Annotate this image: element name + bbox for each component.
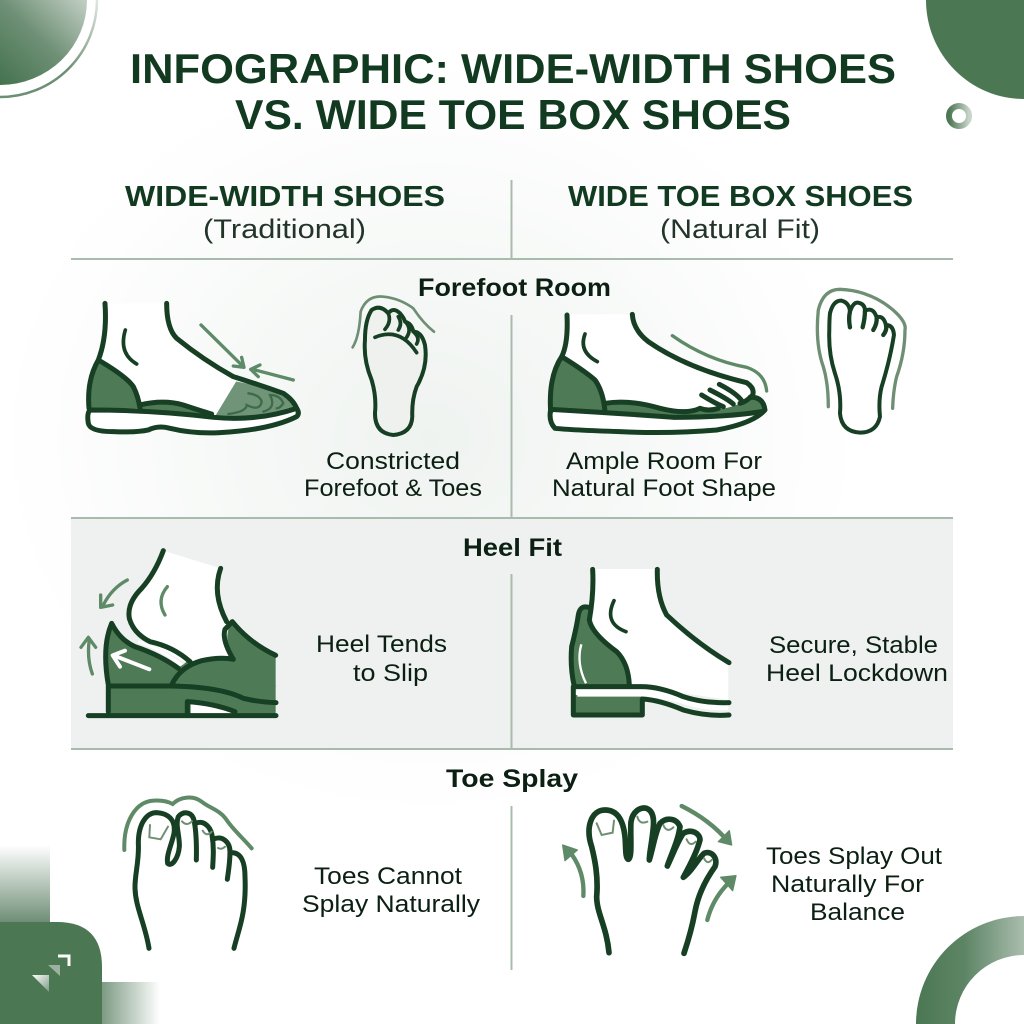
label: secure stable heel lockdown: Secure, Stable [769,632,938,659]
panel: heel fit band [71,518,953,749]
icon: natural fit shoe with ample toe room [550,314,767,433]
label: heel tends to slip: to Slip [353,660,428,687]
label: toes splay out naturally for balance: Naturally For [771,871,924,898]
decoration: top-right corner circle and small ring [926,0,1024,126]
column heading: wide-width shoes [125,181,445,244]
label: ample room for natural foot shape: Ample Room For [566,448,762,475]
label: secure stable heel lockdown: Heel Lockdown [766,660,948,687]
label: toes splay out naturally for balance: Balance [810,899,905,926]
icon: heel slipping out of traditional shoe [81,551,276,716]
label: toes cannot splay naturally: Toes Cannot [314,863,462,890]
column heading: wide toe box shoes: (Natural Fit) [660,214,820,244]
title [130,45,896,138]
label: toes cannot splay naturally: Splay Naturally [302,891,480,918]
decoration: bottom-right corner arc [916,916,1024,1024]
label: toes splay out naturally for balance: Toes Splay Out [766,843,942,870]
title: INFOGRAPHIC: WIDE-WIDTH SHOES [130,45,896,92]
icon: splayed toes with arrows [563,806,736,953]
column heading: wide-width shoes: (Traditional) [203,214,366,244]
label: toes splay out naturally for balance [766,843,942,926]
label: constricted forefoot and toes: Forefoot & Toes [304,475,482,502]
label: toes cannot splay naturally [302,863,480,918]
column heading: wide toe box shoes [568,181,913,244]
label: constricted forefoot and toes: Constricted [326,448,460,475]
label: heel tends to slip: Heel Tends [316,631,447,658]
heading: forefoot room: Forefoot Room [418,274,611,302]
heading: toe splay: Toe Splay [446,765,578,793]
label: constricted forefoot and toes [304,448,482,502]
icon: traditional shoe with constricted forefoot [88,303,298,433]
decoration: top-left corner quarter circle with ring [0,0,97,97]
icon: natural foot outline [817,289,905,433]
column heading: wide-width shoes: WIDE-WIDTH SHOES [125,181,445,213]
icon: cramped toes with outline [124,797,252,948]
label: ample room for natural foot shape: Natural Foot Shape [552,475,776,502]
title: VS. WIDE TOE BOX SHOES [235,91,791,138]
heading: heel fit: Heel Fit [463,534,563,562]
label: heel tends to slip [316,631,447,687]
label: ample room for natural foot shape [552,448,776,502]
icon: constricted foot outline [353,297,434,435]
column heading: wide toe box shoes: WIDE TOE BOX SHOES [568,181,913,213]
icon: secure heel in natural fit shoe [571,569,729,715]
decoration: bottom-left corner blocks [0,845,160,1024]
label: secure stable heel lockdown [766,632,948,687]
